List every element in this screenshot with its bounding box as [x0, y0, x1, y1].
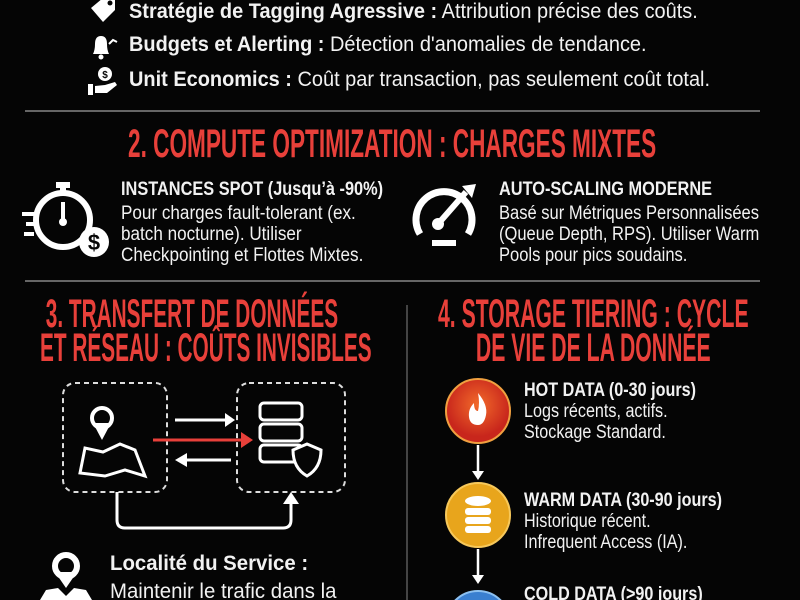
tier: warm	[445, 482, 722, 553]
arrow	[472, 445, 484, 480]
text: Unit Economics : Coût par transaction, pas seulement coût total.	[129, 68, 710, 91]
body: Pools pour pics soudains.	[499, 245, 687, 266]
title: INSTANCES SPOT (Jusqu’à -90%)	[121, 179, 383, 200]
text: Budgets et Alerting : Détection d'anomalies de tendance.	[129, 33, 647, 56]
text: Stratégie de Tagging Agressive : Attribution précise des coûts.	[129, 0, 698, 23]
title: AUTO-SCALING MODERNE	[499, 179, 712, 200]
panel: localité	[40, 552, 336, 600]
panel: instances spot	[22, 179, 383, 266]
text: Localité du Service :	[110, 552, 308, 575]
body	[499, 203, 759, 266]
icon: stopwatch: $	[88, 230, 100, 255]
text: HOT DATA (0-30 jours)	[524, 380, 696, 401]
text	[524, 380, 696, 443]
body: Checkpointing et Flottes Mixtes.	[121, 245, 363, 266]
text: Historique récent.	[524, 511, 651, 532]
text: WARM DATA (30-90 jours)	[524, 490, 722, 511]
text: Infrequent Access (IA).	[524, 532, 687, 553]
timeline: storage tiers	[445, 378, 722, 600]
icon: bell	[93, 36, 118, 60]
icon: fire circle	[445, 378, 511, 444]
heading: section 4	[438, 292, 749, 370]
heading: section 4: 4. STORAGE TIERING : CYCLE	[438, 292, 749, 336]
list item: tagging	[91, 0, 698, 23]
icon: tag	[91, 0, 115, 22]
panel: auto-scaling	[412, 179, 759, 266]
tier: hot	[445, 378, 696, 444]
heading: section 3: 3. TRANSFERT DE DONNÉES	[46, 292, 338, 336]
icon: database circle	[445, 482, 511, 548]
body: Basé sur Métriques Personnalisées	[499, 203, 759, 224]
text	[110, 552, 336, 600]
icon: hand coin: $	[102, 70, 108, 81]
icon: location person	[40, 552, 92, 600]
arrow	[472, 549, 484, 584]
tier: cold	[454, 584, 703, 600]
heading: section 3	[40, 292, 372, 370]
heading: section 4: DE VIE DE LA DONNÉE	[476, 326, 711, 370]
icon: stopwatch	[22, 182, 109, 257]
diagram: data transfer	[62, 382, 346, 530]
heading: section 2: 2. COMPUTE OPTIMIZATION : CHARGES MIXTES	[128, 122, 656, 166]
text: Stockage Standard.	[524, 422, 666, 443]
list item: budgets	[93, 33, 647, 60]
body: (Queue Depth, RPS). Utiliser Warm	[499, 224, 759, 245]
text: Logs récents, actifs.	[524, 401, 668, 422]
icon: hand coin	[88, 67, 117, 95]
icon: cold circle	[454, 590, 502, 600]
body	[121, 203, 363, 266]
body: Pour charges fault-tolerant (ex.	[121, 203, 356, 224]
body: batch nocturne). Utiliser	[121, 224, 302, 245]
icon: gauge	[412, 184, 476, 246]
heading: section 3: ET RÉSEAU : COÛTS INVISIBLES	[40, 326, 372, 370]
text	[524, 490, 722, 553]
list item: unit economics	[88, 67, 710, 95]
